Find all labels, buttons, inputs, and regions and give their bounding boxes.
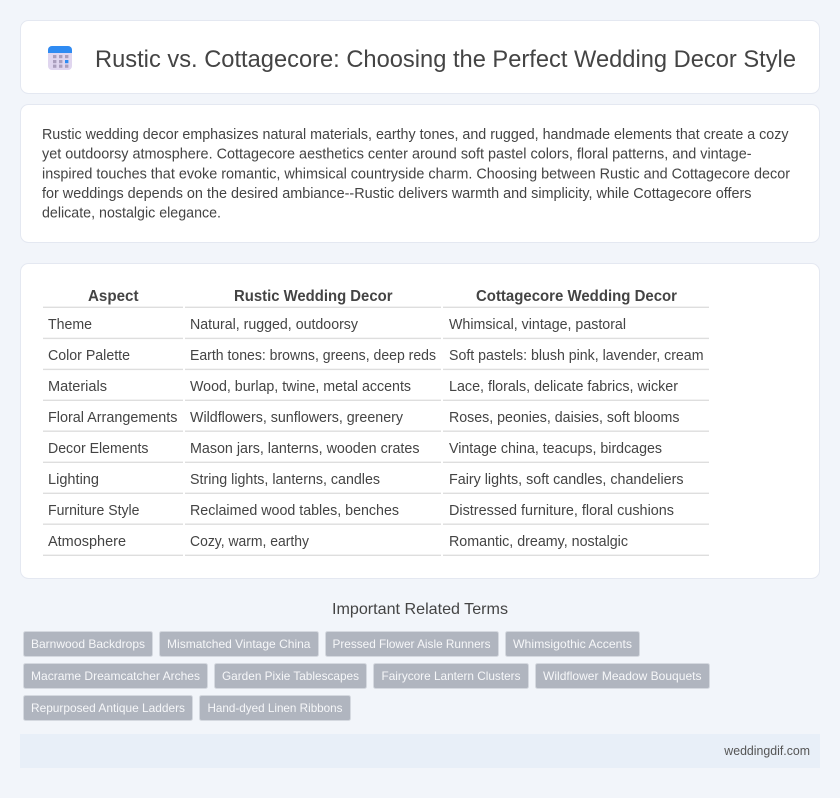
row: Materials: Lace, florals, delicate fabrics, wicker — [449, 379, 678, 395]
row: Furniture Style — [43, 503, 709, 525]
intro paragraph: delicate, nostalgic elegance. — [42, 206, 221, 222]
tag: Repurposed Antique Ladders — [24, 696, 192, 720]
tag: Hand-dyed Linen Ribbons: Hand-dyed Linen Ribbons — [208, 701, 342, 715]
tag: Garden Pixie Tablescapes — [214, 664, 366, 688]
row: Floral Arrangements: Wildflowers, sunflowers, greenery — [190, 410, 404, 426]
intro paragraph — [42, 127, 790, 222]
tag: Repurposed Antique Ladders: Repurposed Antique Ladders — [31, 701, 185, 715]
row: Theme: Whimsical, vintage, pastoral — [449, 317, 626, 333]
heading: related terms: Important Related Terms — [332, 601, 508, 618]
row: Lighting: Lighting — [48, 472, 99, 488]
row: Color Palette: Soft pastels: blush pink, lavender, cream — [449, 348, 704, 364]
panel: comparison table — [20, 264, 820, 578]
tag: Wildflower Meadow Bouquets: Wildflower Meadow Bouquets — [543, 669, 702, 683]
intro paragraph: for weddings depends on the desired ambiance--Rustic delivers warmth and simplicity, while Cottagecore offers — [42, 186, 752, 202]
table header row: Aspect — [88, 288, 138, 305]
table header row: Rustic Wedding Decor — [234, 288, 392, 305]
intro paragraph: inspired touches that evoke romantic, whimsical countryside charm. Choosing between Rustic and Cottagecore decor — [42, 166, 790, 182]
row: Atmosphere: Cozy, warm, earthy — [190, 534, 310, 550]
tag: Barnwood Backdrops — [24, 632, 152, 656]
row: Atmosphere — [43, 534, 709, 556]
tag: Barnwood Backdrops: Barnwood Backdrops — [31, 637, 145, 651]
intro paragraph: yet outdoorsy atmosphere. Cottagecore aesthetics center around soft pastel colors, floral patterns, and vintage- — [42, 147, 752, 163]
row: Materials: Materials — [48, 379, 107, 395]
tag: Macrame Dreamcatcher Arches: Macrame Dreamcatcher Arches — [31, 669, 200, 683]
intro paragraph: Rustic wedding decor emphasizes natural materials, earthy tones, and rugged, handmade elements that create a cozy — [42, 127, 789, 143]
row: Floral Arrangements: Roses, peonies, daisies, soft blooms — [449, 410, 680, 426]
row: Atmosphere: Atmosphere — [48, 534, 126, 550]
row: Decor Elements — [43, 441, 709, 463]
row: Floral Arrangements: Floral Arrangements — [48, 410, 178, 426]
row: Theme: Natural, rugged, outdoorsy — [190, 317, 359, 333]
tag: Wildflower Meadow Bouquets — [536, 664, 710, 688]
row: Theme — [43, 317, 709, 339]
tag: Mismatched Vintage China — [160, 632, 318, 656]
row: Furniture Style: Reclaimed wood tables, benches — [190, 503, 399, 519]
tag: Whimsigothic Accents — [506, 632, 640, 656]
title: Rustic vs. Cottagecore: Choosing the Perfect Wedding Decor Style — [95, 46, 796, 73]
tag: Hand-dyed Linen Ribbons — [200, 696, 350, 720]
row: Materials: Wood, burlap, twine, metal accents — [190, 379, 411, 395]
row: Lighting: Fairy lights, soft candles, chandeliers — [449, 472, 684, 488]
tag: Macrame Dreamcatcher Arches — [24, 664, 208, 688]
row: Color Palette: Color Palette — [48, 348, 130, 364]
icon: calendar — [48, 46, 72, 70]
table header row — [43, 288, 709, 308]
row: Theme: Theme — [48, 317, 92, 333]
tag: Pressed Flower Aisle Runners: Pressed Flower Aisle Runners — [332, 637, 490, 651]
tag: Garden Pixie Tablescapes: Garden Pixie Tablescapes — [222, 669, 359, 683]
row: Atmosphere: Romantic, dreamy, nostalgic — [449, 534, 628, 550]
header panel — [20, 20, 820, 94]
row: Color Palette — [43, 348, 709, 370]
tag: Mismatched Vintage China: Mismatched Vintage China — [167, 637, 311, 651]
row: Decor Elements: Decor Elements — [48, 441, 148, 457]
panel: introduction — [20, 104, 820, 242]
related term tags — [24, 632, 710, 720]
table header row: Cottagecore Wedding Decor — [476, 288, 677, 305]
footer bar — [20, 734, 820, 768]
row: Floral Arrangements — [43, 410, 709, 432]
row: Furniture Style: Distressed furniture, floral cushions — [449, 503, 674, 519]
tag: Fairycore Lantern Clusters: Fairycore Lantern Clusters — [382, 669, 520, 683]
row: Decor Elements: Vintage china, teacups, birdcages — [449, 441, 662, 457]
row: Color Palette: Earth tones: browns, greens, deep reds — [190, 348, 436, 364]
tag: Pressed Flower Aisle Runners — [326, 632, 498, 656]
row: Lighting: String lights, lanterns, candles — [190, 472, 380, 488]
tag: Whimsigothic Accents: Whimsigothic Accents — [513, 637, 632, 651]
row: Materials — [43, 379, 709, 401]
row: Decor Elements: Mason jars, lanterns, wooden crates — [190, 441, 420, 457]
row: Lighting — [43, 472, 709, 494]
footer source text: weddingdif.com — [723, 744, 810, 758]
tag: Fairycore Lantern Clusters — [374, 664, 528, 688]
row: Furniture Style: Furniture Style — [48, 503, 140, 519]
